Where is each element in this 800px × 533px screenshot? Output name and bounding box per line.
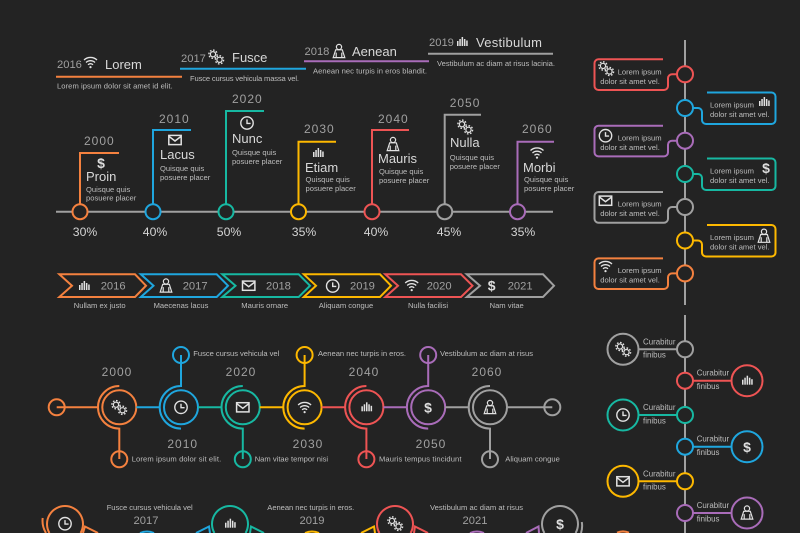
- chevron: 2020: 2020: [427, 280, 452, 292]
- spine: [684, 315, 686, 533]
- flag: 2050 Nulla 45%: [437, 96, 500, 239]
- badge: person: [677, 498, 762, 528]
- flag: 2000 Proin 30%: 2000: [84, 134, 115, 148]
- node: clock: [43, 506, 98, 533]
- flag: 2030 Etiam 35%: 35%: [292, 225, 316, 239]
- flag: 2010 Lacus 40%: [143, 112, 211, 239]
- badge: cut-off orange: [617, 531, 629, 533]
- chevron: 2020: Nulla facilisi: [408, 301, 448, 310]
- flag: 2060 Morbi 35%: [510, 122, 575, 239]
- badge: bars: Curabitur: [697, 369, 730, 378]
- callout: bars: [677, 92, 776, 124]
- callout: person: [677, 225, 776, 256]
- header item: 2016 Lorem: 2016: [57, 59, 82, 71]
- callout: dollar: $: [762, 160, 770, 176]
- node: dollar: [542, 506, 582, 533]
- chevron: 2019: 2019: [350, 280, 375, 292]
- callout: envelope: [594, 192, 693, 223]
- header item: 2017 Fusce: 2017: [181, 53, 206, 65]
- header item: 2019 Vestibulum: Vestibulum: [476, 35, 542, 50]
- badge: person: Curabitur: [697, 501, 730, 510]
- badge: clock: [608, 400, 693, 430]
- chevron: 2017: [141, 274, 228, 310]
- callout: gears: [594, 59, 693, 90]
- flag: 2010 Lacus 40%: Lacus: [160, 147, 195, 162]
- flag: 2060 Morbi 35%: 2060: [522, 122, 553, 136]
- vertical badge timeline: [608, 315, 762, 533]
- flag: 2050 Nulla 45%: 2050: [450, 96, 480, 110]
- badge: dollar: Curabitur: [697, 435, 730, 444]
- ring: 2040: [322, 365, 462, 467]
- flag: 2000 Proin 30%: Quisque quis: [86, 185, 131, 194]
- node: 2019: 2019: [300, 515, 324, 527]
- chevron: 2021: 2021: [508, 280, 533, 292]
- node: 2017: Fusce cursus vehicula vel: [107, 503, 193, 512]
- ring: 2010: Fusce cursus vehicula vel: [193, 349, 280, 358]
- callout: dollar: [677, 158, 776, 190]
- ring: 2040: 2040: [349, 365, 379, 379]
- axis line: [56, 211, 553, 213]
- flag: 2040 Mauris 40%: Quisque quis: [379, 167, 424, 176]
- header item: 2018 Aenean: 2018: [304, 46, 329, 58]
- header item: 2017 Fusce: Fusce cursus vehicula massa vel.: [190, 74, 299, 83]
- ring: 2010: [136, 347, 280, 451]
- callout: envelope: Lorem ipsum: [618, 200, 662, 208]
- ring: 2000: 2000: [102, 365, 132, 379]
- flag: 2020 Nunc 50%: posuere placer: [232, 157, 283, 166]
- ring: 2060: 2060: [472, 365, 502, 379]
- chevron: 2018: 2018: [266, 280, 291, 292]
- callout: person: Lorem ipsum: [710, 233, 754, 242]
- header item: 2017 Fusce: [180, 50, 306, 83]
- flag: 2050 Nulla 45%: Quisque quis: [450, 153, 494, 162]
- flag: 2020 Nunc 50%: Quisque quis: [232, 148, 277, 157]
- node: 2021: [430, 503, 539, 533]
- node: 2017: [107, 503, 210, 533]
- node: bars: [212, 506, 264, 533]
- callout: clock: dolor sit amet vel.: [600, 143, 660, 152]
- badge: gears: finibus: [643, 351, 666, 360]
- header item: 2019 Vestibulum: [428, 35, 555, 68]
- badge: bars: [677, 365, 762, 396]
- ring: 2030: 2030: [293, 437, 323, 451]
- ring: 2050: Vestibulum ac diam at risus: [440, 349, 533, 358]
- ring: 2050: 2050: [416, 437, 446, 451]
- flag: 2000 Proin 30%: 30%: [73, 225, 97, 239]
- header item: 2018 Aenean: Aenean nec turpis in eros blandit.: [313, 66, 427, 76]
- callout: wifi: dolor sit amet vel.: [600, 276, 660, 284]
- badge: gears: Curabitur: [643, 337, 676, 346]
- badge: envelope: [608, 466, 693, 497]
- flag: 2020 Nunc 50%: [217, 92, 283, 239]
- flag: 2010 Lacus 40%: 40%: [143, 225, 167, 239]
- vertical callout timeline: [594, 40, 776, 305]
- flag: 2040 Mauris 40%: [364, 112, 430, 239]
- flag timeline: [56, 92, 575, 239]
- header item: 2016 Lorem: Lorem: [105, 57, 142, 72]
- header item: 2018 Aenean: Aenean: [352, 44, 397, 59]
- flag: 2040 Mauris 40%: 2040: [378, 112, 409, 126]
- flag: 2010 Lacus 40%: Quisque quis: [160, 164, 205, 173]
- ring: 2060: Aliquam congue: [505, 455, 560, 464]
- callout: dollar: dolor sit amet vel.: [710, 176, 770, 185]
- callout: gears: Lorem ipsum: [618, 68, 662, 76]
- chevron: 2021: Nam vitae: [490, 301, 524, 310]
- header item: 2019 Vestibulum: 2019: [429, 37, 454, 49]
- ring: 2020: 2020: [226, 365, 256, 379]
- badge: envelope: Curabitur: [643, 469, 676, 478]
- flag: 2060 Morbi 35%: posuere placer: [524, 184, 575, 193]
- chevron: 2018: Mauris ornare: [241, 301, 288, 310]
- callout: bars: Lorem ipsum: [710, 100, 754, 110]
- chevron: 2016: Nullam ex justo: [74, 301, 126, 310]
- flag: 2040 Mauris 40%: 40%: [364, 225, 388, 239]
- callout: person: dolor sit amet vel.: [710, 242, 770, 252]
- badge: bars: finibus: [697, 382, 720, 391]
- flag: 2040 Mauris 40%: posuere placer: [379, 176, 430, 185]
- ring: 2040: Mauris tempus tincidunt: [379, 455, 462, 464]
- flag: 2000 Proin 30%: Proin: [86, 169, 116, 184]
- node: gears: [377, 506, 428, 533]
- flag: 2030 Etiam 35%: posuere placer: [306, 184, 356, 193]
- flag: 2030 Etiam 35%: Quisque quis: [306, 175, 350, 184]
- chevron ribbon: [59, 274, 554, 310]
- badge: clock: Curabitur: [643, 403, 676, 412]
- ring: 2050: $: [424, 400, 432, 416]
- node: 2021: 2021: [463, 515, 487, 527]
- callout: wifi: [594, 258, 693, 289]
- node: 2019: [267, 503, 375, 533]
- flag: 2050 Nulla 45%: Nulla: [450, 135, 480, 150]
- header item: 2018 Aenean: [304, 44, 429, 76]
- badge: gears: [608, 334, 693, 365]
- node: 2019: Aenean nec turpis in eros.: [267, 503, 354, 512]
- node: dollar: $: [556, 516, 564, 532]
- chevron: 2017: Maecenas lacus: [154, 301, 209, 310]
- flag: 2000 Proin 30%: $: [97, 155, 105, 171]
- ring: 2000: [49, 365, 221, 467]
- badge: dollar: [677, 431, 762, 462]
- chevron: 2018: [222, 274, 310, 310]
- chevron: 2021: $: [488, 278, 496, 294]
- flag: 2060 Morbi 35%: 35%: [511, 225, 535, 239]
- flag: 2010 Lacus 40%: 2010: [159, 112, 190, 126]
- callout: envelope: dolor sit amet vel.: [600, 209, 660, 218]
- flag: 2030 Etiam 35%: 2030: [304, 122, 335, 136]
- header item: 2016 Lorem: Lorem ipsum dolor sit amet id elit.: [57, 82, 173, 90]
- callout: clock: Lorem ipsum: [618, 134, 662, 142]
- callout: gears: dolor sit amet vel.: [600, 77, 660, 86]
- chevron: 2016: 2016: [101, 280, 126, 292]
- chevron: 2019: [304, 274, 391, 310]
- node: 2021: Vestibulum ac diam at risus: [430, 503, 523, 512]
- chevron: 2017: 2017: [183, 280, 208, 292]
- flag: 2040 Mauris 40%: Mauris: [378, 151, 418, 166]
- flag: 2060 Morbi 35%: Quisque quis: [524, 175, 569, 184]
- badge: envelope: finibus: [643, 483, 666, 492]
- flag: 2000 Proin 30%: posuere placer: [86, 194, 137, 202]
- ring timeline: [49, 347, 560, 467]
- flag: 2020 Nunc 50%: 50%: [217, 225, 241, 239]
- chevron: 2020: [385, 274, 472, 310]
- badge: clock: finibus: [643, 416, 666, 426]
- flag: 2060 Morbi 35%: Morbi: [523, 160, 556, 175]
- ring: 2010: 2010: [167, 437, 198, 451]
- chevron: 2016: [59, 274, 146, 310]
- header item: 2016 Lorem: [56, 57, 182, 90]
- flag: 2020 Nunc 50%: Nunc: [232, 131, 263, 146]
- badge: dollar: $: [743, 439, 751, 455]
- flag: 2030 Etiam 35%: [291, 122, 356, 239]
- badge: person: finibus: [697, 514, 720, 524]
- ring: 2030: Aenean nec turpis in eros.: [318, 349, 406, 358]
- ring: 2000: Lorem ipsum dolor sit elit.: [132, 455, 221, 464]
- node: 2017: 2017: [134, 515, 158, 527]
- ring: 2060: [445, 365, 560, 467]
- ring: 2050: [383, 347, 533, 451]
- flag: 2050 Nulla 45%: posuere placer: [450, 162, 500, 171]
- callout: clock: [594, 126, 693, 156]
- chevron: 2019: Aliquam congue: [319, 301, 373, 310]
- flag: 2010 Lacus 40%: posuere placer: [160, 173, 211, 182]
- callout: dollar: Lorem ipsum: [710, 166, 754, 176]
- chevron: 2021: [467, 274, 554, 310]
- bottom cut-off timeline: [43, 503, 582, 533]
- flag: 2000 Proin 30%: [72, 134, 137, 239]
- flag: 2020 Nunc 50%: 2020: [232, 92, 263, 106]
- callout: wifi: Lorem ipsum: [618, 266, 662, 275]
- flag: 2050 Nulla 45%: 45%: [437, 225, 461, 239]
- ring: 2020: Nam vitae tempor nisi: [255, 455, 328, 464]
- flag: 2030 Etiam 35%: Etiam: [305, 160, 338, 175]
- header item: 2017 Fusce: Fusce: [232, 50, 267, 65]
- ring: 2030: [260, 347, 406, 451]
- badge: dollar: finibus: [697, 448, 720, 457]
- callout: bars: dolor sit amet vel.: [710, 110, 770, 119]
- spine: [684, 40, 686, 305]
- ring: 2020: [198, 365, 328, 467]
- header item: 2019 Vestibulum: Vestibulum ac diam at risus lacinia.: [437, 59, 555, 68]
